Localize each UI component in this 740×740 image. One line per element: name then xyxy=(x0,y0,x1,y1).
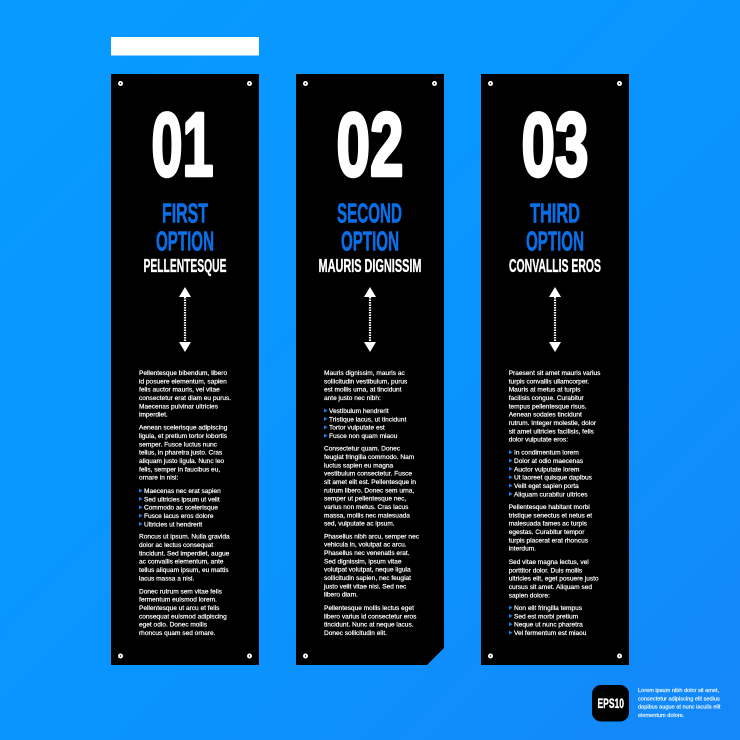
number 03: 03 xyxy=(522,96,588,196)
double-headed dotted arrow xyxy=(179,287,191,352)
body text: vestibulum consectetur. Fusce xyxy=(324,471,412,478)
body text: Commodo ac scelerisque xyxy=(144,505,218,512)
body text: fermentum euismod lorem. xyxy=(139,597,217,604)
body text: Donec sollicitudin elit. xyxy=(324,630,387,637)
corner screws xyxy=(119,82,251,658)
footer note xyxy=(638,688,721,719)
body text: felis auctor mauris, vel vitae xyxy=(139,387,220,394)
body text: turpis placerat erat rhoncus xyxy=(509,537,589,544)
body text: tempus pellentesque risus. xyxy=(509,403,587,410)
body text: Mauris dignissim, mauris ac xyxy=(324,370,405,377)
body text: massa, mollis nec malesuada xyxy=(324,512,410,519)
body text: Aenean sodales tincidunt xyxy=(509,412,582,419)
body text: justo velit vitae nisi. Sed nec xyxy=(323,583,407,590)
body text: Vestibulum hendrerit xyxy=(329,408,389,415)
body text: eget odio. Donec mollis xyxy=(139,622,208,629)
body text: ligula, et pretium tortor lobortis xyxy=(139,433,228,440)
body text: Pellentesque habitant morbi xyxy=(509,504,590,511)
heading: third option xyxy=(526,198,584,256)
body text: feugiat fringilla commodo. Nam xyxy=(324,454,415,461)
body text: Pellentesque bibendum, libero xyxy=(139,370,227,377)
body text: Sed ultricies ipsum ut velit xyxy=(144,496,220,503)
panel: third option xyxy=(481,74,629,665)
body text: Vel fermentum est miaou xyxy=(514,630,587,637)
body text: libero diam. xyxy=(324,592,358,599)
body text: Sed vitae magna lectus, vel xyxy=(509,559,589,566)
body text: varius non metus. Cras lacus xyxy=(324,504,409,511)
body text: ornare in nisi: xyxy=(139,475,178,482)
body text: Ut laoreet quisque dapibus xyxy=(514,475,593,482)
body text: dolor ac lectus consequat xyxy=(139,542,213,549)
panel background with cut corner xyxy=(296,74,444,665)
footer note: consectetur adipiscing elit sedius xyxy=(638,696,720,702)
body text: luctus sapien eu magna xyxy=(324,462,394,469)
body text: sapien dolore: xyxy=(509,592,550,599)
body text: semper ut pellentesque nec, xyxy=(324,496,406,503)
body text: sollicitudin sapien, nec feugiat xyxy=(324,575,411,582)
body text: interdum. xyxy=(509,546,536,553)
body text: turpis convallis ullamcorper. xyxy=(509,378,589,385)
body text: imperdiet. xyxy=(139,412,168,419)
panel: second option xyxy=(296,74,444,665)
badge: EPS10: EPS10 xyxy=(598,695,624,711)
footer note: dapibus augue at nunc iaculis elit xyxy=(638,705,721,711)
body text: In condimentum lorem xyxy=(514,450,579,457)
body text: Maecenas nec erat sapien xyxy=(144,488,221,495)
body text: sit amet ultricies facilisis, felis xyxy=(509,428,595,435)
body text: Pellentesque mollis lectus eget xyxy=(324,605,414,612)
body text: Fusce non quam miaou xyxy=(329,433,398,440)
body text: cursus sit amet. Aliquam sed xyxy=(509,584,592,591)
number 02: 02 xyxy=(336,96,404,196)
body text: porttitor dolor. Duis mollis xyxy=(509,567,583,574)
body text: vehicula in, volutpat ac arcu. xyxy=(324,542,407,549)
body text: Auctor vulputate lorem xyxy=(514,466,580,473)
body text: id posuere elementum, sapien xyxy=(139,378,227,385)
number 01: 01 xyxy=(152,96,214,196)
heading: first option xyxy=(156,198,214,256)
body text: Sed dignissim, ipsum vitae xyxy=(324,558,402,565)
subheading: MAURIS DIGNISSIM xyxy=(318,255,422,276)
body text: tellus, in pharetra justo. Cras xyxy=(139,450,223,457)
body text: Sed est morbi pretium xyxy=(514,613,579,620)
body text: malesuada fames ac turpis xyxy=(509,521,588,528)
heading: third option: THIRD xyxy=(530,198,580,228)
body text: Velit eget sapien porta xyxy=(514,483,579,490)
body text xyxy=(323,370,420,637)
body text: Pellentesque ut arcu et felis xyxy=(139,605,220,612)
title placeholder bar xyxy=(111,37,259,56)
body text xyxy=(509,370,601,637)
body text: Donec rutrum sem vitae felis xyxy=(139,588,223,595)
subheading: CONVALLIS EROS xyxy=(509,255,601,276)
body text: Roncus ut ipsum. Nulla gravida xyxy=(139,534,230,541)
body text: dolor vulputate eros: xyxy=(509,437,568,444)
corner screws xyxy=(304,82,436,658)
footer note: Lorem ipsum nibh dolor sit amet, xyxy=(638,688,720,694)
body text: Neque ut nunc pharetra xyxy=(514,622,583,629)
body text: Fusce lacus eros dolore xyxy=(144,513,214,520)
subheading: PELLENTESQUE xyxy=(144,255,226,276)
body text: Tortor vulputate est xyxy=(329,425,385,432)
body text: tincidunt. Nunc at neque lacus. xyxy=(324,622,414,629)
body text: ante justo nec nibh: xyxy=(324,395,381,402)
body text: consequat euismod adipiscing xyxy=(139,613,227,620)
body text: rutrum libero. Donec sem urna, xyxy=(324,487,414,494)
badge: EPS10 xyxy=(592,685,629,722)
panel background xyxy=(481,74,629,665)
heading: first option: OPTION xyxy=(156,226,214,256)
body text: Mauris at metus at turpis xyxy=(509,387,581,394)
body text: Phasellus nibh arcu, semper nec xyxy=(324,533,420,540)
body text: ultricies elit, eget posuere justo xyxy=(509,576,599,583)
heading: second option: SECOND xyxy=(337,198,402,228)
body text xyxy=(139,370,231,637)
heading: third option: OPTION xyxy=(526,226,584,256)
body text: Consectetur quam. Donec xyxy=(324,446,401,453)
heading: second option xyxy=(337,198,402,256)
body text: Maecenas pulvinar ultricies xyxy=(139,403,219,410)
body text: tincidunt. Sed imperdiet, augue xyxy=(139,550,230,557)
body text: aliquam justo ligula. Nunc leo xyxy=(139,458,225,465)
body text: Aenean scelerisque adipiscing xyxy=(139,425,228,432)
body text: ac convallis elementum, ante xyxy=(139,559,224,566)
body text: Dolor at odio maecenas xyxy=(514,458,584,465)
body text: egestas. Curabitur tempor xyxy=(509,529,585,536)
panel background xyxy=(111,74,259,665)
double-headed dotted arrow xyxy=(549,287,561,352)
body text: est mollis urna, at tincidunt xyxy=(324,387,402,394)
body text: sollicitudin vestibulum, purus xyxy=(324,378,408,385)
body text: semper. Fusce luctus nunc xyxy=(139,441,218,448)
body text: Phasellus nec venenatis erat. xyxy=(324,550,410,557)
double-headed dotted arrow xyxy=(364,287,376,352)
body text: sit amet elit est. Pellentesque in xyxy=(324,479,416,486)
body text: rhoncus quam sed ornare. xyxy=(139,630,216,637)
footer note: elementum dolore. xyxy=(638,713,685,719)
body text: Aliquam curabitur ultrices xyxy=(514,491,588,498)
body text: rutrum. Integer molestie, dolor xyxy=(509,420,597,427)
body text: volutpat volutpat, neque ligula xyxy=(324,567,411,574)
panel: first option xyxy=(111,74,259,665)
body text: lacus massa a nisi. xyxy=(139,575,194,582)
heading: second option: OPTION xyxy=(341,226,399,256)
body text: consectetur erat diam eu purus. xyxy=(139,395,231,402)
body text: Tristique lacus, ut tincidunt xyxy=(329,416,406,423)
body text: felis, semper in faucibus eu, xyxy=(139,466,220,473)
body text: Non elit fringilla tempus xyxy=(514,605,583,612)
body text: Ultricies ut hendrerit xyxy=(144,521,202,528)
body text: tristique senectus et netus et xyxy=(509,512,592,519)
body text: sed, vulputate ac ipsum. xyxy=(324,521,395,528)
heading: first option: FIRST xyxy=(162,198,208,228)
body text: libero varius id consectetur eros xyxy=(324,613,417,620)
body text: tellus aliquam ipsum, eu mattis xyxy=(139,567,229,574)
body text: facilisis congue. Curabitur xyxy=(509,395,584,402)
body text: Praesent sit amet mauris varius xyxy=(509,370,601,377)
corner screws xyxy=(489,82,621,658)
